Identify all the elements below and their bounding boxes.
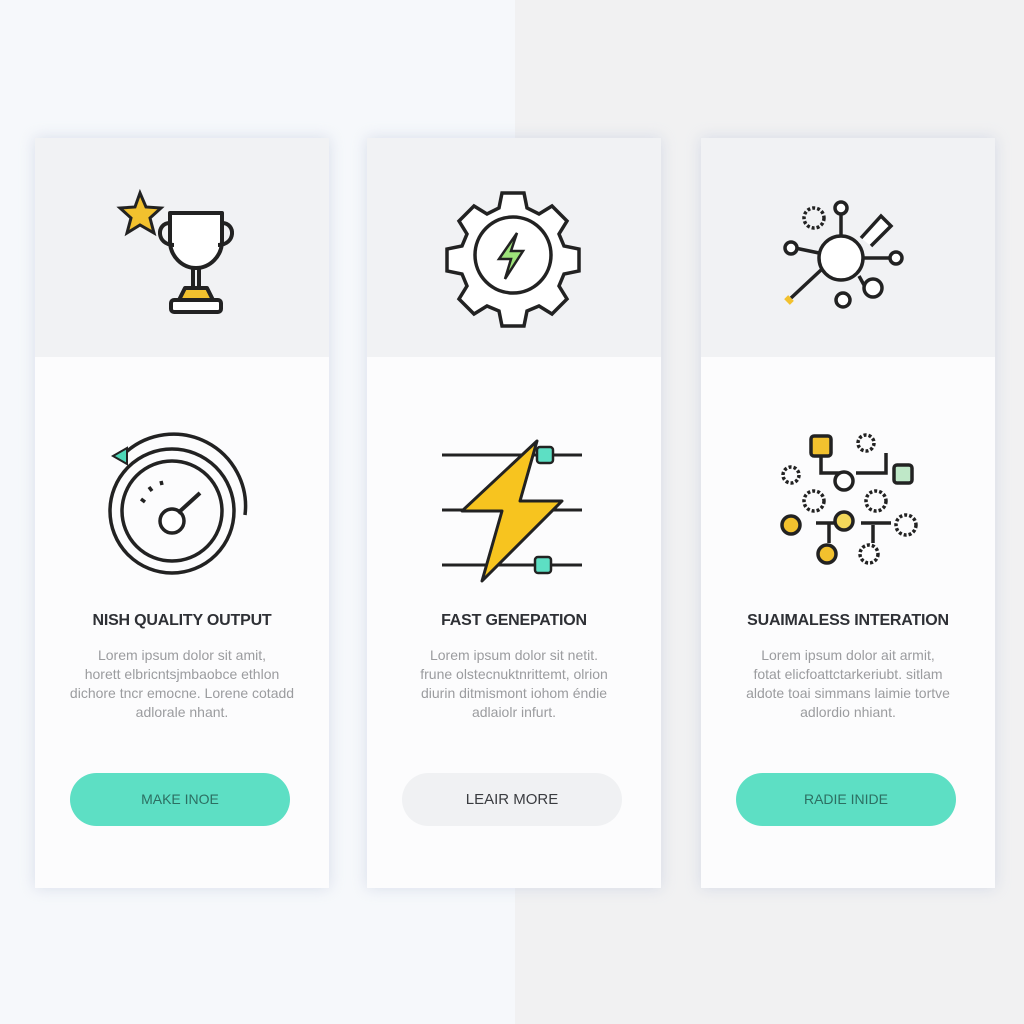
- button: LEAIR MORE: [466, 791, 558, 808]
- body text: Lorem ipsum dolor sit amit,: [98, 647, 266, 663]
- button: MAKE INOE: [141, 791, 219, 807]
- icon: trophy with star: [116, 189, 234, 314]
- body text: Lorem ipsum dolor sit netit.: [430, 647, 598, 663]
- body text: Lorem ipsum dolor ait armit,: [761, 647, 935, 663]
- heading: NISH QUALITY OUTPUT: [92, 612, 272, 629]
- heading: SUAIMALESS INTERATION: [747, 612, 949, 629]
- button: [70, 773, 290, 826]
- body text: horett elbricntsjmbaobce ethlon: [85, 666, 279, 682]
- icon: gauge: [108, 432, 248, 575]
- body text: fotat elicfoattctarkeriubt. sitlam: [753, 666, 943, 682]
- icon: hub network: [783, 200, 904, 309]
- card: fast generation: [367, 138, 661, 888]
- body text: [420, 647, 608, 720]
- body text: aldote toai simmans laimie tortve: [746, 685, 950, 701]
- icon: gear with bolt: [445, 191, 581, 328]
- body text: adlordio nhiant.: [800, 704, 896, 720]
- card: high quality output: [35, 138, 329, 888]
- body text: [70, 647, 294, 720]
- button: [402, 773, 622, 826]
- body text: [746, 647, 950, 720]
- body text: dichore tncr emocne. Lorene cotadd: [70, 685, 294, 701]
- heading: FAST GENEPATION: [441, 612, 587, 629]
- icon: lightning with sliders: [442, 440, 582, 582]
- body text: adlaiolr infurt.: [472, 704, 556, 720]
- button: RADIE INIDE: [804, 791, 888, 807]
- body text: frune olstecnuktnrittemt, olrion: [420, 666, 608, 682]
- icon: network nodes: [780, 433, 918, 565]
- button: [736, 773, 956, 826]
- card: seamless integration: [701, 138, 995, 888]
- body text: adlorale nhant.: [136, 704, 228, 720]
- body text: diurin ditmismont iohom éndie: [421, 685, 607, 701]
